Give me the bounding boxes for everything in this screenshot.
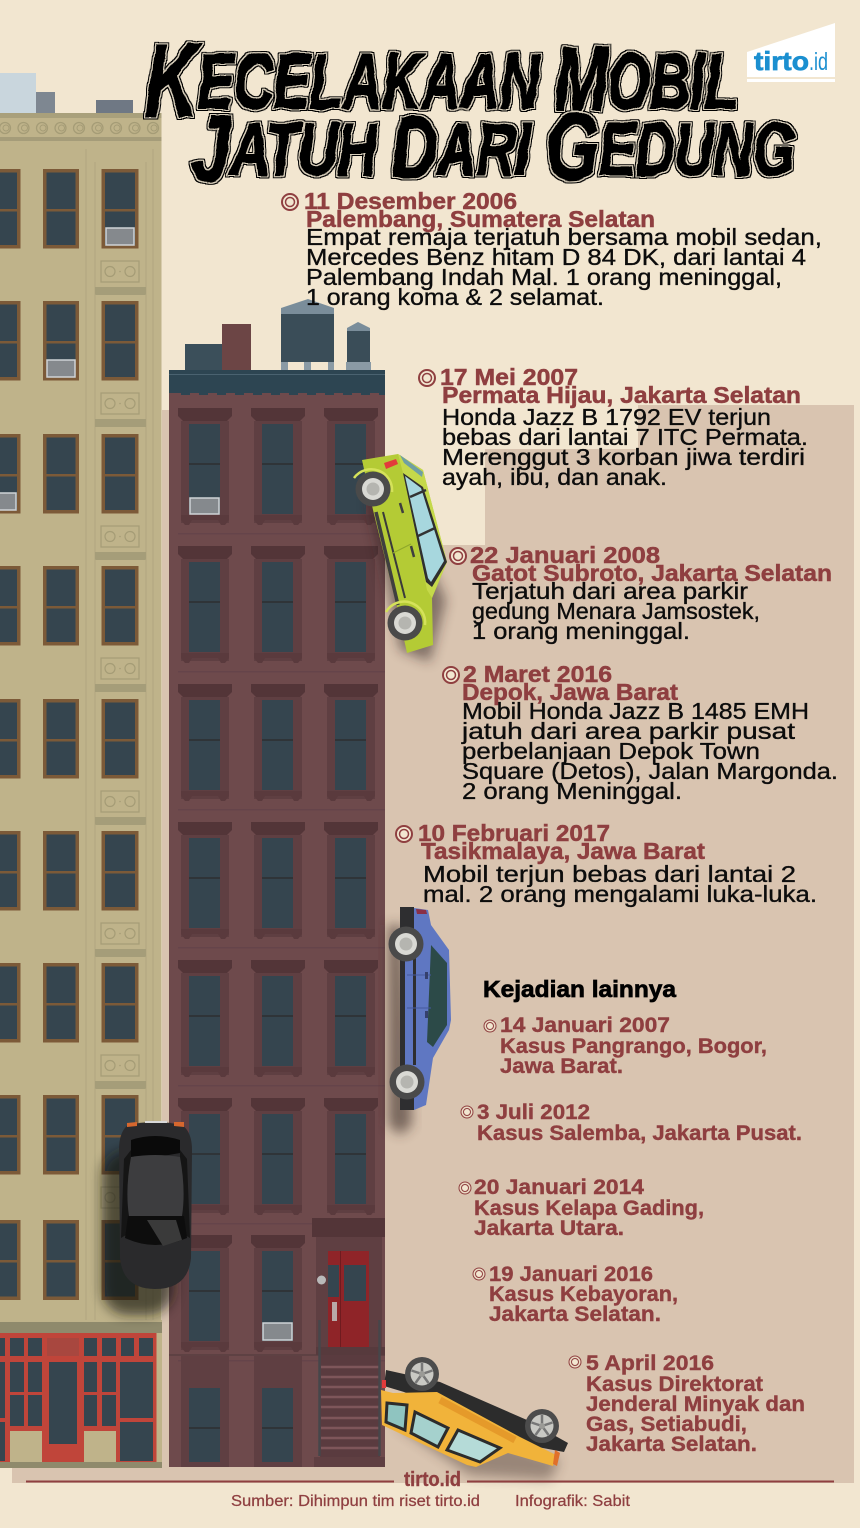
building: left beige tower	[0, 73, 162, 1322]
building: brown brownstone	[169, 370, 385, 1467]
other: 5 April 2016: 5 April 2016	[586, 1351, 714, 1375]
event: 17 Mei 2007: ayah, ibu, dan anak.	[442, 464, 667, 490]
car: green hatchback	[354, 454, 447, 662]
other: 5 April 2016: Kasus Direktorat	[586, 1372, 763, 1396]
event: 17 Mei 2007: bebas dari lantai 7 ITC Permata.	[442, 424, 808, 450]
event: 17 Mei 2007: 17 Mei 2007	[440, 364, 578, 390]
other: 20 Januari 2014: Kasus Kelapa Gading,	[474, 1196, 704, 1220]
footer: tirto.id	[404, 1469, 461, 1491]
event: 11 Desember 2006	[282, 188, 822, 310]
other: 20 Januari 2014	[459, 1175, 704, 1240]
other: 3 Juli 2012	[461, 1100, 802, 1145]
event: 2 Maret 2016: jatuh dari area parkir pusat	[461, 718, 796, 744]
event: 22 Januari 2008: Terjatuh dari area parkir	[472, 578, 748, 604]
other: 19 Januari 2016: 19 Januari 2016	[489, 1262, 653, 1286]
event: 17 Mei 2007	[419, 364, 808, 490]
logo: tirto.id: .id	[809, 48, 828, 76]
event: 10 Februari 2017: 10 Februari 2017	[418, 820, 610, 846]
title: G	[546, 94, 599, 199]
title: OBIL	[608, 37, 738, 125]
event: 2 Maret 2016: Mobil Honda Jazz B 1485 EMH	[462, 698, 809, 724]
title: ARI	[436, 108, 546, 191]
other: 19 Januari 2016: Kasus Kebayoran,	[489, 1282, 678, 1306]
title	[145, 23, 795, 201]
title: K	[145, 23, 202, 139]
event: 2 Maret 2016: perbelanjaan Depok Town	[462, 738, 760, 764]
other: 3 Juli 2012: 3 Juli 2012	[477, 1100, 590, 1124]
event: 22 Januari 2008: 1 orang meninggal.	[472, 618, 690, 644]
event: 11 Desember 2006: 11 Desember 2006	[304, 188, 517, 214]
event: 11 Desember 2006: Mercedes Benz hitam D 84 DK, dari lantai 4	[306, 244, 806, 270]
title: ATUH	[229, 108, 392, 191]
event: 11 Desember 2006: Palembang Indah Mal. 1 orang meninggal,	[306, 264, 782, 290]
event: 10 Februari 2017: Tasikmalaya, Jawa Barat	[421, 838, 705, 864]
other: 5 April 2016: Gas, Setiabudi,	[586, 1412, 747, 1436]
other: 20 Januari 2014: 20 Januari 2014	[474, 1175, 644, 1199]
other: 5 April 2016	[569, 1351, 805, 1456]
logo: tirto.id: tirto	[754, 46, 809, 76]
event: 2 Maret 2016: Square (Detos), Jalan Margonda.	[462, 758, 838, 784]
event: 10 Februari 2017: mal. 2 orang mengalami luka-luka.	[423, 881, 817, 907]
event: 22 Januari 2008: gedung Menara Jamsostek,	[472, 598, 760, 624]
event: 11 Desember 2006: Palembang, Sumatera Selatan	[306, 206, 655, 232]
other: 5 April 2016: Jakarta Selatan.	[586, 1432, 757, 1456]
other: 5 April 2016: Jenderal Minyak dan	[586, 1392, 805, 1416]
other: 14 Januari 2007: 14 Januari 2007	[500, 1013, 670, 1037]
other: 19 Januari 2016	[473, 1262, 678, 1326]
footer: Infografik: Sabit	[515, 1493, 631, 1510]
event: 2 Maret 2016	[443, 661, 838, 804]
event: 2 Maret 2016: 2 Maret 2016	[463, 661, 612, 687]
other: 20 Januari 2014: Jakarta Utara.	[474, 1216, 624, 1240]
event: 11 Desember 2006: 1 orang koma & 2 selamat.	[306, 284, 604, 310]
event: 17 Mei 2007: Honda Jazz B 1792 EV terjun	[442, 404, 771, 430]
backdrop shadow panel	[12, 405, 854, 1483]
other: 19 Januari 2016: Jakarta Selatan.	[489, 1302, 661, 1326]
car: blue sedan	[388, 907, 451, 1135]
footer: Sumber: Dihimpun tim riset tirto.id	[231, 1493, 480, 1510]
footer	[26, 1469, 834, 1510]
event: 10 Februari 2017: Mobil terjun bebas dari lantai 2	[423, 861, 796, 887]
other: 14 Januari 2007: Jawa Barat.	[500, 1054, 623, 1078]
other: 14 Januari 2007	[484, 1013, 767, 1078]
event: 17 Mei 2007: Merenggut 3 korban jiwa terdiri	[442, 444, 805, 470]
rooftop: water tanks	[185, 299, 371, 370]
logo: tirto.id	[747, 23, 835, 82]
shopfront	[0, 1320, 162, 1468]
event: 17 Mei 2007: Permata Hijau, Jakarta Selatan	[442, 382, 801, 408]
event: 22 Januari 2008	[450, 542, 832, 644]
event: 22 Januari 2008: Gatot Subroto, Jakarta Selatan	[472, 560, 832, 586]
car: black coupe top view	[102, 1121, 192, 1315]
event: 11 Desember 2006: Empat remaja terjatuh bersama mobil sedan,	[306, 224, 822, 250]
title: EDUNG	[599, 108, 795, 191]
title: ECELAKAAN	[197, 37, 554, 125]
title: D	[392, 100, 437, 196]
event: 2 Maret 2016: 2 orang Meninggal.	[462, 778, 682, 804]
other: 3 Juli 2012: Kasus Salemba, Jakarta Pusat.	[477, 1121, 802, 1145]
event: 10 Februari 2017	[396, 820, 817, 907]
heading: other incidents: Kejadian lainnya	[483, 976, 676, 1002]
title: M	[554, 28, 610, 130]
other: 14 Januari 2007: Kasus Pangrango, Bogor,	[500, 1034, 767, 1058]
car: yellow SUV upside down	[381, 1357, 568, 1480]
event: 2 Maret 2016: Depok, Jawa Barat	[462, 679, 678, 705]
entrance door and stoop	[312, 1218, 385, 1467]
title: J	[192, 96, 232, 201]
event: 22 Januari 2008: 22 Januari 2008	[470, 542, 660, 568]
